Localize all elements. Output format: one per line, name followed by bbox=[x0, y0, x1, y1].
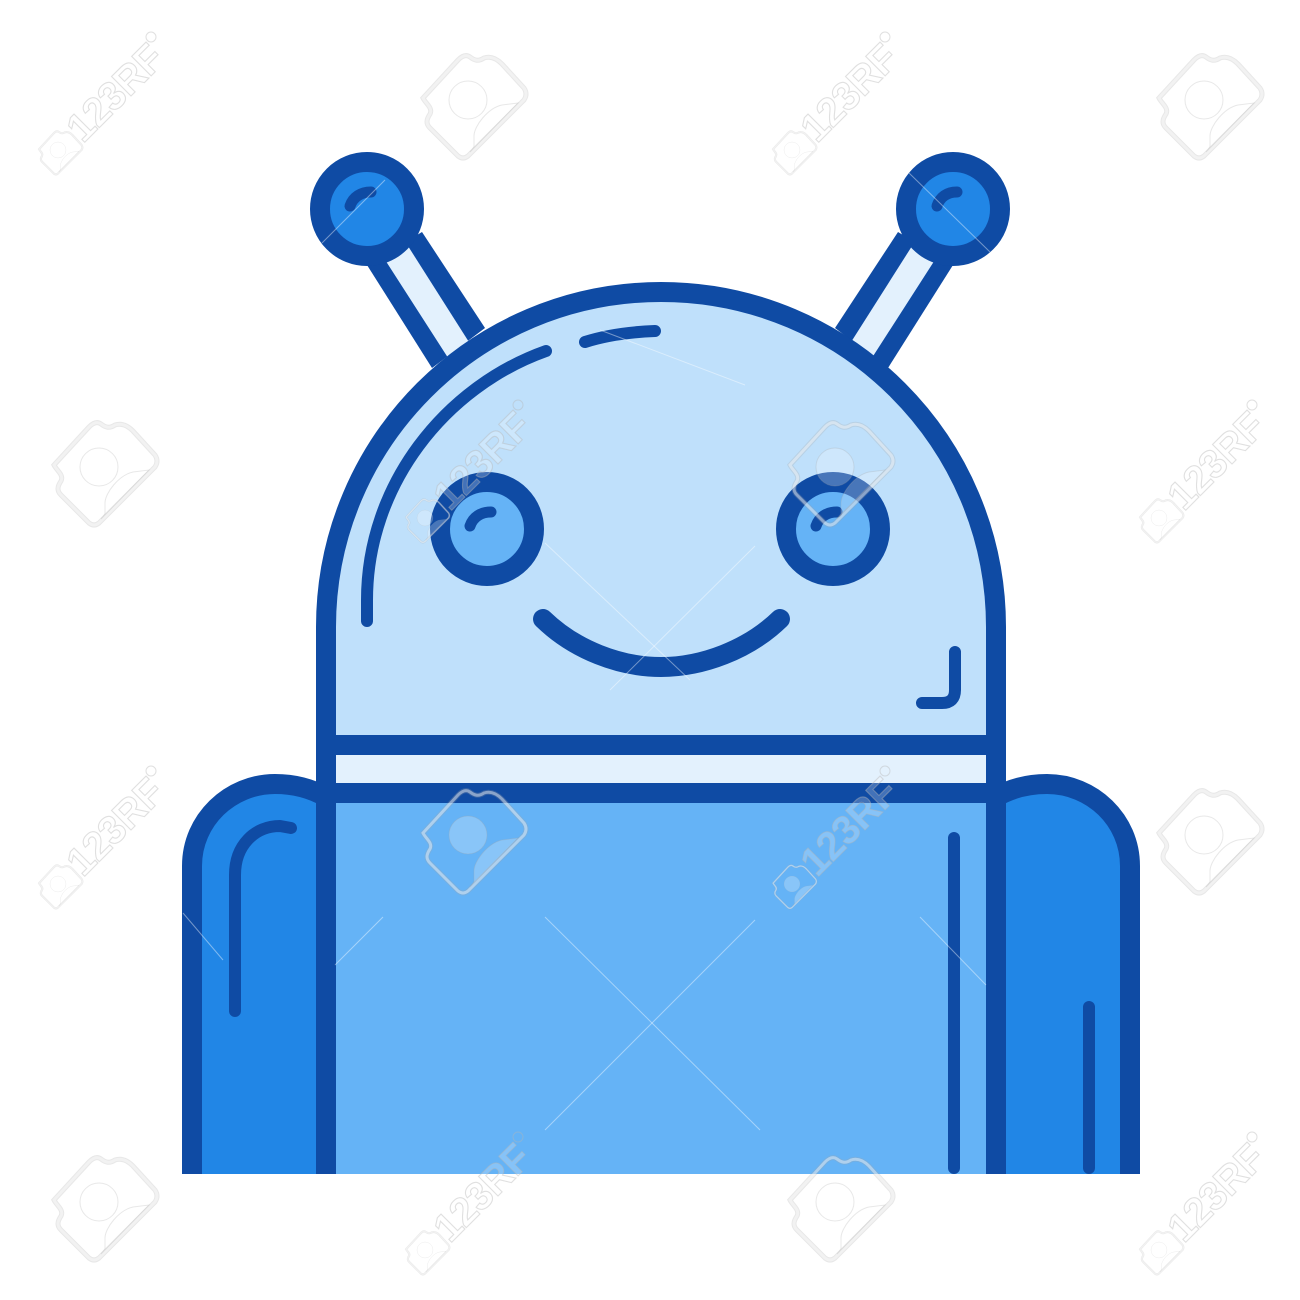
watermark logo: second row far right bbox=[1140, 400, 1273, 542]
left antenna bbox=[320, 162, 485, 368]
right antenna glint bbox=[937, 192, 957, 206]
watermark logo: second row centre: 123RF bbox=[425, 404, 539, 518]
left antenna stick bbox=[367, 224, 485, 368]
left eye bbox=[440, 482, 534, 576]
right antenna ball bbox=[906, 162, 1000, 256]
watermark icon: bottom right bbox=[790, 1158, 893, 1260]
torso fill bbox=[326, 793, 996, 1174]
left arm highlight bbox=[235, 826, 291, 1011]
right arm bbox=[996, 784, 1130, 1174]
dome short highlight bbox=[585, 331, 655, 342]
watermark icon: second row right bbox=[790, 423, 893, 525]
watermark logo: second row centre bbox=[406, 400, 539, 542]
head outline bbox=[326, 292, 996, 1174]
robot body bbox=[326, 793, 996, 1174]
smile bbox=[543, 619, 780, 667]
watermark logo: top right: 123RF bbox=[792, 36, 906, 150]
watermark icon: second row left bbox=[54, 423, 157, 525]
watermark icon: top centre bbox=[423, 56, 526, 158]
watermark logo: top left: 123RF bbox=[58, 36, 172, 150]
watermark icon: bottom left bbox=[54, 1158, 157, 1260]
watermark logo: third row right: 123RF bbox=[792, 770, 906, 884]
left antenna glint bbox=[350, 192, 371, 206]
watermark hairlines over the icon bbox=[183, 172, 990, 1130]
dome fill bbox=[326, 292, 996, 745]
neck band top line bbox=[326, 735, 996, 755]
corner highlight bbox=[922, 652, 955, 703]
neck band bottom line bbox=[326, 783, 996, 803]
watermark logo: third row right bbox=[773, 766, 906, 908]
neck band bbox=[326, 745, 996, 793]
torso highlight bbox=[948, 838, 960, 1168]
watermark logo: bottom centre: 123RF bbox=[425, 1136, 539, 1250]
left antenna ball bbox=[320, 162, 414, 256]
watermark logo: second row far right: 123RF bbox=[1159, 404, 1273, 518]
right antenna stick bbox=[835, 224, 953, 368]
watermark logo: bottom far right bbox=[1140, 1132, 1273, 1274]
left arm shape bbox=[192, 784, 326, 1174]
watermark logo: third row left: 123RF bbox=[58, 770, 172, 884]
watermark logo: top right bbox=[773, 32, 906, 174]
watermark logo: top left bbox=[39, 32, 172, 174]
left arm bbox=[192, 784, 326, 1174]
robot head bbox=[326, 292, 996, 1174]
watermark icon: top far right bbox=[1159, 56, 1262, 158]
watermark icon: third row centre bbox=[423, 791, 526, 893]
right arm highlight bbox=[1083, 1007, 1095, 1168]
dome long highlight bbox=[367, 351, 546, 621]
watermark logo: bottom far right: 123RF bbox=[1159, 1136, 1273, 1250]
right eye bbox=[786, 482, 880, 576]
watermark icon: third row far right bbox=[1159, 791, 1262, 893]
watermark logo: bottom centre bbox=[406, 1132, 539, 1274]
right arm shape bbox=[996, 784, 1130, 1174]
watermark logo: third row left bbox=[39, 766, 172, 908]
right antenna bbox=[835, 162, 1000, 368]
